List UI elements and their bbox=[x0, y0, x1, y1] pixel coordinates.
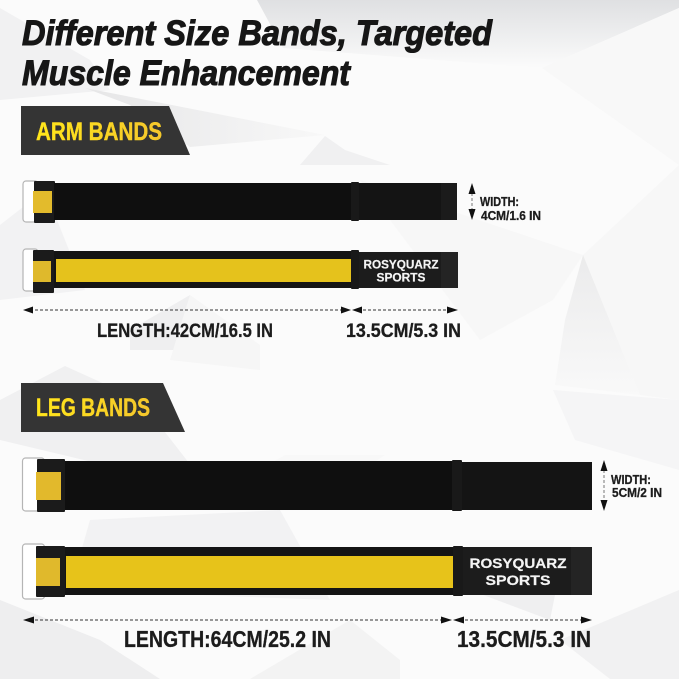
title: Different Size Bands, Targeted bbox=[22, 14, 493, 53]
heading: arm bands bbox=[21, 106, 190, 155]
label: arm width: WIDTH: bbox=[480, 195, 519, 209]
label: arm length: LENGTH:42CM/16.5 IN bbox=[97, 320, 273, 342]
title: Muscle Enhancement bbox=[22, 54, 351, 93]
label: arm strap length: 13.5CM/5.3 IN bbox=[346, 320, 461, 342]
logo text: arm band: ROSYQUARZ bbox=[364, 260, 438, 272]
label: leg width: WIDTH: bbox=[611, 472, 651, 487]
arrow: leg length bbox=[23, 616, 452, 624]
heading: arm bands: ARM BANDS bbox=[36, 118, 162, 146]
label: leg length: LENGTH:64CM/25.2 IN bbox=[124, 626, 331, 652]
heading: leg bands: LEG BANDS bbox=[36, 394, 150, 422]
logo text: leg band: ROSYQUARZ bbox=[470, 555, 567, 571]
arrow: arm strap length bbox=[352, 306, 458, 314]
arrow: leg width bbox=[600, 460, 608, 511]
title bbox=[22, 14, 493, 93]
logo text: leg band: SPORTS bbox=[486, 572, 550, 588]
leg band: front view bbox=[22, 544, 592, 599]
label: arm width: 4CM/1.6 IN bbox=[481, 209, 541, 223]
label: leg width bbox=[611, 472, 662, 500]
logo text: leg band bbox=[470, 555, 567, 588]
label: leg width: 5CM/2 IN bbox=[612, 485, 662, 500]
arm band: front view bbox=[23, 249, 458, 293]
logo text: arm band: SPORTS bbox=[376, 272, 426, 284]
label: arm width bbox=[480, 195, 541, 223]
leg band: back view bbox=[22, 458, 592, 512]
arrow: arm width bbox=[468, 183, 476, 220]
arrow: leg strap length bbox=[453, 616, 592, 624]
arm band: back view bbox=[23, 181, 457, 223]
heading: leg bands bbox=[21, 383, 185, 432]
arrow: arm length bbox=[23, 306, 351, 314]
logo text: arm band bbox=[364, 260, 438, 284]
label: leg strap length: 13.5CM/5.3 IN bbox=[457, 626, 591, 652]
